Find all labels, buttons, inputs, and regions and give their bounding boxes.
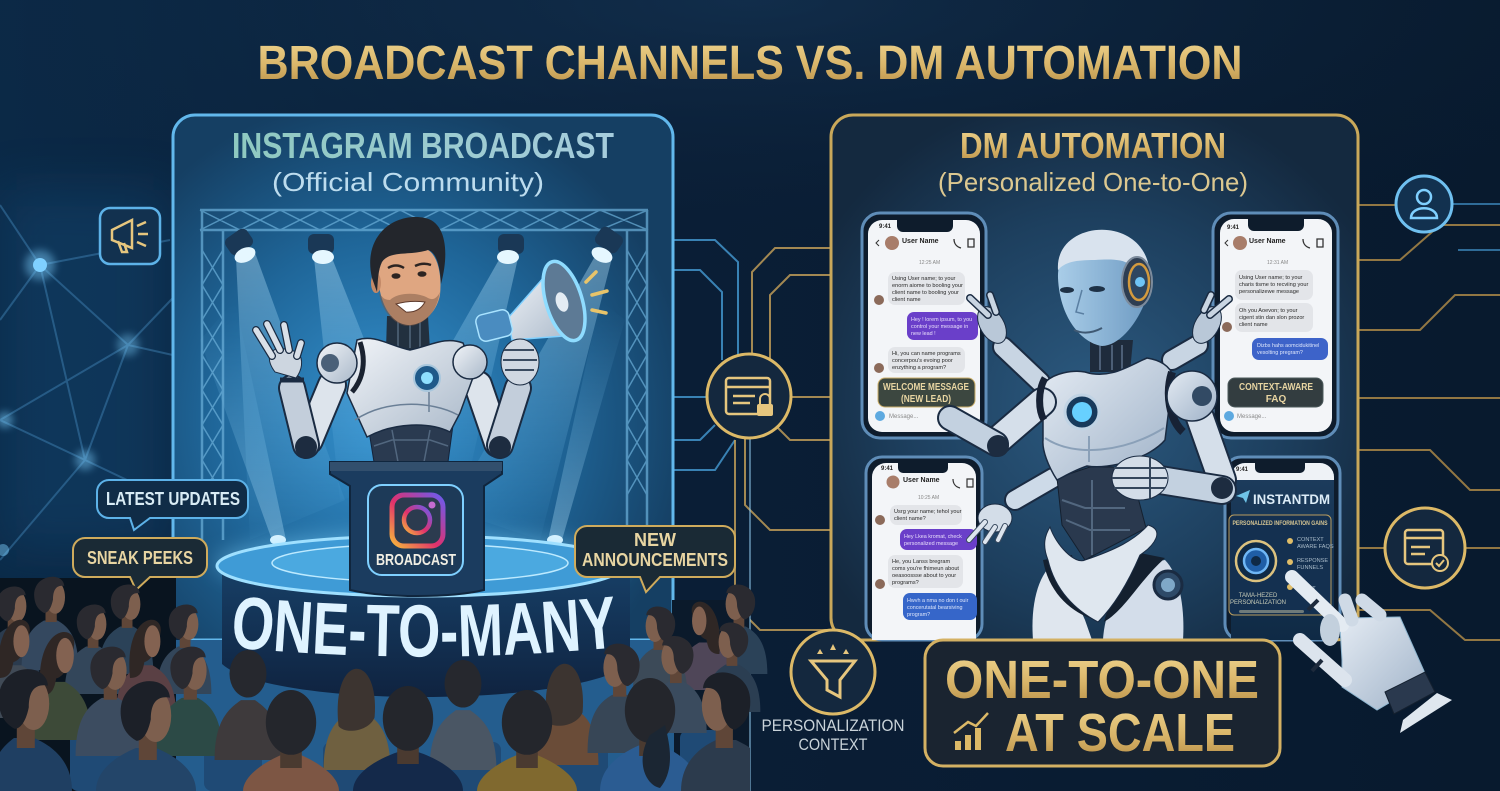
phone: personalized message: 10:25 AM [918,495,939,501]
spotlight beams [200,250,625,540]
phone: welcome message: (NEW LEAD) [901,394,951,405]
phone: welcome message: User Name [902,238,939,245]
back left arm [970,295,1040,382]
icon: funnel badge [791,630,875,714]
phone: context-aware FAQ: vesolting pregram? [1257,350,1303,356]
phone: welcome message: client name to booling your [892,290,959,296]
right upper arm [478,385,498,443]
stage platform and drum [215,533,630,697]
spotlights [223,224,625,545]
neck [386,316,430,350]
icon: growth chart [954,713,988,750]
abdomen [1057,467,1146,560]
icon: chat lock badge [707,354,791,438]
phone: personalized message: User Name [903,477,940,484]
phone: context-aware FAQ: client name [1239,322,1268,328]
phone: welcome message: enzything a program? [892,365,946,371]
phone: InstantDM dashboard: PERSONALIZATION [1230,600,1286,606]
seats [70,730,720,791]
panel: DM Automation [831,115,1358,640]
phone: welcome message: client name [892,297,921,303]
robot presenter [256,217,607,462]
speech bubble: new announcements: NEW [634,530,676,550]
speech bubble: new announcements: ANNOUNCEMENTS [582,550,728,570]
phone: welcome message [862,213,986,438]
phone: context-aware FAQ: Dizbs hahs aomcidukitinel [1257,343,1319,349]
phone: welcome message: Using User name; to your [892,276,956,282]
phone: personalized message: client name? [894,516,926,522]
back arm shadow: left upper arm [309,385,332,440]
right forearm [500,388,518,445]
panel frame [831,115,1358,640]
phone: InstantDM dashboard: 9:41 [1236,467,1249,473]
phone: welcome message: WELCOME MESSAGE [883,382,969,393]
network nodes: left decoration [0,205,195,560]
panel subheading: (Personalized One-to-One) [938,167,1248,197]
middle row [25,632,91,740]
podium [330,462,502,596]
panel: Instagram Broadcast [100,115,673,640]
phone: InstantDM dashboard: FUNNELS [1297,565,1323,571]
phone: context-aware FAQ: Message... [1237,414,1267,420]
robot automation [950,230,1233,640]
phone: personalized message: oeasoossse about to your [892,573,956,579]
panel heading: DM AUTOMATION [960,125,1226,166]
left forearm [292,388,306,445]
back rows [0,587,39,676]
speech bubble: latest updates [97,480,248,530]
phone: context-aware FAQ: CONTEXT-AWARE [1239,382,1313,393]
megaphone [474,257,607,345]
phone: welcome message: Hey ! lorem ipsum, to you [911,317,972,323]
front row heads [0,669,49,748]
right main arm [1112,371,1233,500]
phone: InstantDM dashboard: PERSONALIZED INFORMATION GAINS [1232,520,1328,527]
head [1058,230,1152,346]
speech bubble: sneak peeks: SNEAK PEEKS [87,548,193,568]
phone: InstantDM dashboard: RESPONSE [1297,558,1328,564]
head [370,217,445,326]
phone: context-aware FAQ: 12:31 AM [1267,260,1288,266]
callout: one-to-one at scale: AT SCALE [1005,703,1235,763]
phone: welcome message: 12:25 AM [919,260,940,266]
phone: welcome message: concerpou's evoing poor [892,358,953,364]
phone: InstantDM dashboard: TRUST [1297,586,1316,592]
legs [1032,560,1092,640]
phone: context-aware FAQ: User Name [1249,238,1286,245]
phone: context-aware FAQ: personalizewe message [1239,289,1299,295]
shoulders [317,343,357,383]
right hand [501,339,539,385]
phone: context-aware FAQ: charis tisme to recviing your [1239,282,1308,288]
callout: one-to-one at scale: ONE-TO-ONE [945,650,1259,710]
phone: personalized message: Hwvh a nma no don t ouir [907,598,969,604]
phone: InstantDM dashboard [1225,457,1340,640]
phone: welcome message: Hi, you can name programs [892,351,961,357]
label: personalization context [762,716,904,754]
phone: personalized message: 9:41 [881,466,894,472]
phone: InstantDM dashboard: INSTANTDM [1253,491,1330,507]
stage truss [200,210,648,540]
chest [1043,358,1173,480]
phone: personalized message: program? [907,612,930,618]
phone: InstantDM dashboard: CONTEXT [1297,537,1324,543]
torso [347,338,475,437]
phone: welcome message: Message... [889,414,919,420]
callout: one-to-one at scale [925,640,1280,766]
title: BROADCAST CHANNELS VS. DM AUTOMATION [258,37,1242,90]
phone: personalized message: concerutatal bearsiving [907,605,962,611]
phone: context-aware FAQ: cigent stin dan slon prozor [1239,315,1304,321]
phone: personalized message [866,457,982,640]
label: personalization context: CONTEXT [798,735,868,754]
icon: user badge [1396,176,1452,232]
panel heading: INSTAGRAM BROADCAST [232,125,614,166]
phone: context-aware FAQ [1213,213,1338,438]
big label: one-to-many: ONE-TO-MANY [234,596,613,658]
phone: welcome message: 9:41 [879,224,892,230]
left main arm [950,378,1045,457]
panel subheading: (Official Community) [272,167,544,197]
speech bubble: new announcements [575,526,735,592]
phone: context-aware FAQ: Oh you Aoevon; to your [1239,308,1298,314]
icon: megaphone badge [100,208,160,264]
panel frame [173,115,673,640]
front row bodies [0,738,72,791]
phone: welcome message: enorm aiome to booling your [892,283,963,289]
phone: personalized message: Usrg your name; tehol your [894,509,962,515]
phone: personalized message: Hey Lkea kromat, check [904,534,962,540]
speech bubble: sneak peeks [73,538,207,590]
robot hand pointing [1292,577,1452,733]
phone: personalized message: He, you Lanss bregram [892,559,950,565]
phone: personalized message: programs? [892,580,919,586]
left hand [256,324,302,378]
phone: welcome message: new lead ! [911,331,936,337]
icon: Instagram logo [368,485,463,575]
audience crowd [0,577,767,791]
phone: context-aware FAQ: 9:41 [1227,225,1240,231]
speech bubble: latest updates: LATEST UPDATES [106,489,240,509]
phone: InstantDM dashboard: TAMA-HEZED [1239,593,1278,599]
phone: personalized message: coms you're fhimeun about [892,566,959,572]
lower left arm [969,478,1053,542]
icon: document check badge [1385,508,1465,588]
abdomen [368,425,453,462]
pelvis [1045,525,1157,622]
phone: personalized message: personalized message [904,541,958,547]
back right arm [1172,295,1229,360]
phone: welcome message: control your message in [911,324,968,330]
label: personalization context: PERSONALIZATION [762,716,904,735]
phone: context-aware FAQ: Using User name; to your [1239,275,1303,281]
podium label: BROADCAST [376,552,456,569]
phone: InstantDM dashboard: AWARE FAQS [1297,544,1334,550]
neck [1090,340,1133,372]
circuit lines: center and right [673,204,1500,640]
lower dark backdrop and floor [0,415,750,791]
phone: context-aware FAQ: FAQ [1266,394,1286,405]
